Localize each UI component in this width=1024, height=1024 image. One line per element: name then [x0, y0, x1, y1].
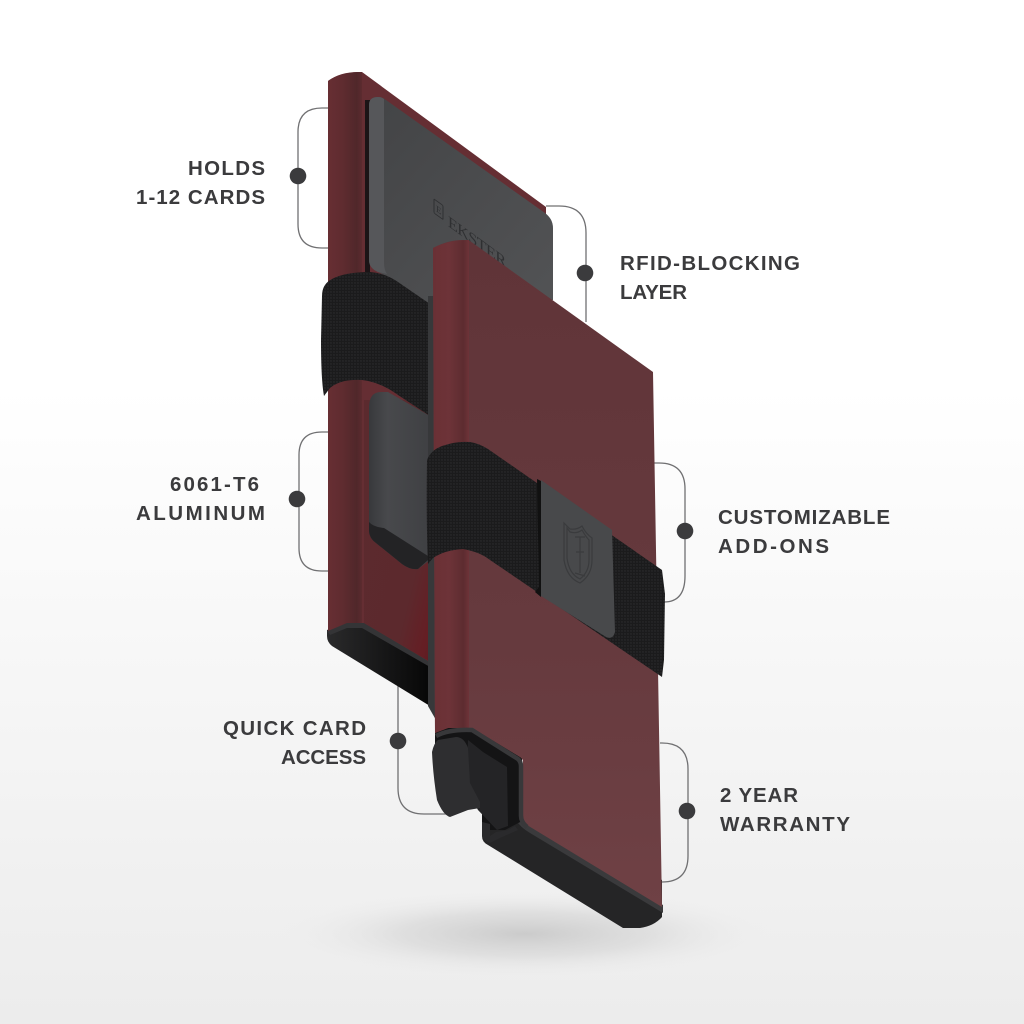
- label: warranty: WARRANTY: [720, 813, 850, 836]
- front spine: [433, 240, 469, 733]
- tab grip: [432, 737, 480, 817]
- label: aluminum: ALUMINUM: [136, 502, 265, 525]
- label: holds cards: 1-12 CARDS: [136, 186, 265, 209]
- label: aluminum: 6061-T6: [170, 473, 259, 496]
- label: quick access: QUICK CARD: [223, 717, 366, 740]
- label: RFID layer: [620, 252, 800, 304]
- label: RFID layer: RFID-BLOCKING: [620, 252, 800, 275]
- label: add-ons: [718, 506, 890, 558]
- label: warranty: 2 YEAR: [720, 784, 798, 807]
- bracket dot: aluminum: [289, 491, 305, 507]
- bracket: warranty: [660, 743, 695, 882]
- bracket dot: quick access: [390, 733, 406, 749]
- back wallet inner lower: [364, 400, 430, 662]
- lower card bevel: [369, 522, 428, 569]
- label: quick access: ACCESS: [281, 746, 366, 769]
- notch back: [435, 726, 522, 830]
- black base with notch: [482, 780, 662, 928]
- front bottom lip: [436, 730, 527, 827]
- bracket dot: RFID layer: [577, 265, 593, 281]
- gap strip between wallets: [428, 296, 436, 720]
- back wallet: [321, 72, 553, 706]
- label: holds cards: [136, 157, 265, 209]
- label: add-ons: CUSTOMIZABLE: [718, 506, 890, 529]
- brand name: EKSTER: [448, 212, 506, 272]
- RFID card: [369, 97, 553, 308]
- back wallet black base: [327, 623, 430, 706]
- label: warranty: [720, 784, 850, 836]
- label: quick access: [223, 717, 366, 769]
- back elastic band: [321, 272, 430, 416]
- bracket: aluminum: [289, 432, 328, 571]
- bracket dot: add-ons: [677, 523, 693, 539]
- base lip: [516, 815, 663, 913]
- back channel shadow: [365, 100, 370, 272]
- base hole frame: [482, 822, 518, 843]
- label: holds cards: HOLDS: [188, 157, 265, 180]
- front face: [433, 240, 662, 907]
- bracket dot: holds cards: [290, 168, 306, 184]
- front elastic band: [427, 442, 665, 677]
- bracket: RFID layer: [546, 206, 593, 322]
- ground shadow: [275, 890, 775, 978]
- pull tab button: [432, 737, 508, 830]
- bracket: add-ons: [654, 463, 693, 602]
- card engraved brand: [434, 199, 506, 272]
- band shadow left of clip: [535, 479, 541, 597]
- back wallet spine: [328, 72, 362, 631]
- label: aluminum: [136, 473, 265, 525]
- label: add-ons: ADD-ONS: [718, 535, 829, 558]
- label: RFID layer: LAYER: [620, 281, 687, 304]
- bracket: holds cards: [290, 108, 328, 248]
- bracket dot: warranty: [679, 803, 695, 819]
- lower card section: [369, 392, 430, 569]
- tab arm: [466, 740, 508, 830]
- shield emblem: [564, 523, 592, 583]
- card side strip: [369, 97, 387, 274]
- clip with shield: [541, 480, 615, 638]
- brand badge: E: [436, 204, 442, 218]
- back wallet base lip: [327, 622, 430, 667]
- bracket: quick access: [390, 686, 448, 814]
- front wallet: [427, 240, 665, 928]
- back wallet face: [328, 72, 546, 662]
